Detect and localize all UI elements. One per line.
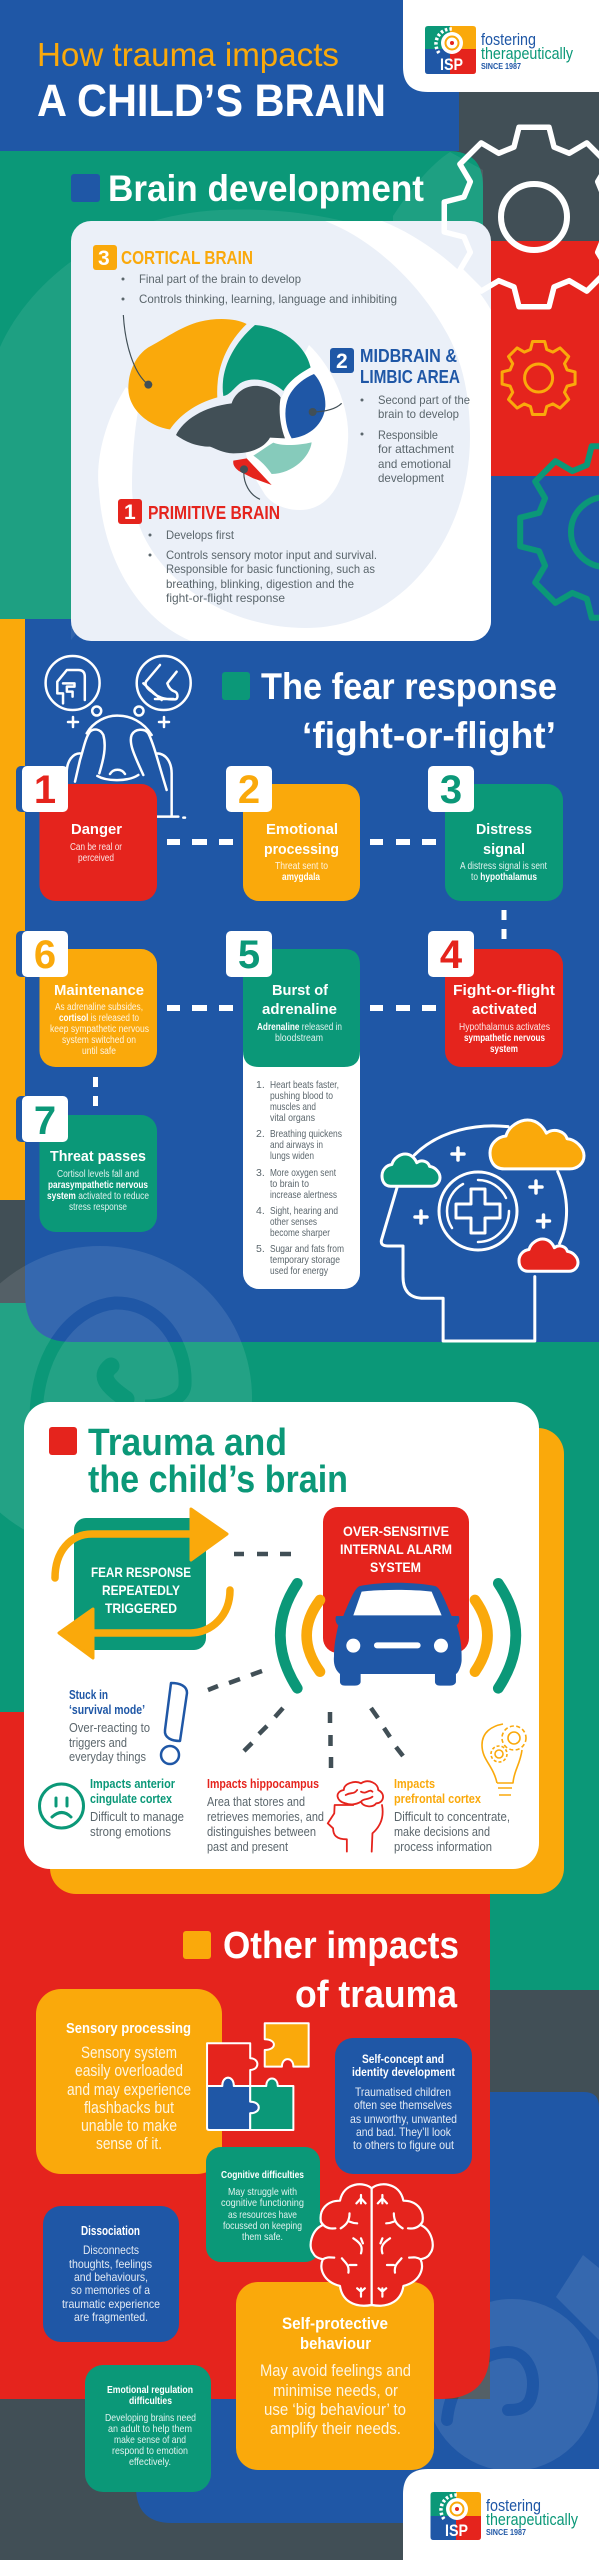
box: emotional regulation difficulties: effectively. — [129, 2456, 171, 2468]
step 2: emotional processing: Threat sent to — [275, 861, 328, 872]
step 7: threat passes: stress response — [69, 1202, 127, 1213]
callout: stuck in survival mode — [69, 1683, 187, 1764]
label: midbrain and limbic area: and emotional — [378, 457, 451, 471]
box: emotional regulation difficulties: Emotional regulation — [107, 2384, 193, 2396]
box: sensory processing — [36, 1989, 222, 2174]
callout: hippocampus: distinguishes between — [207, 1825, 316, 1839]
step 7: threat passes: 7 — [34, 1099, 56, 1143]
callout: stuck in survival mode: ‘survival mode’ — [69, 1703, 145, 1717]
numbered list of effects: pushing blood to — [270, 1090, 333, 1102]
logo panel: bottom: fostering — [486, 2496, 541, 2515]
step 4: fight-or-flight activated: 4 — [440, 933, 463, 977]
label: midbrain and limbic area: for attachment — [378, 442, 455, 456]
step 4: fight-or-flight activated: Hypothalamus activates — [459, 1022, 550, 1033]
label: primitive brain: Develops first — [166, 528, 235, 542]
icon: green gear — [520, 446, 599, 618]
step 6: maintenance: system switched on — [62, 1035, 136, 1046]
label: midbrain and limbic area: development — [378, 471, 445, 485]
box: cognitive difficulties: them safe. — [242, 2231, 283, 2243]
box: sensory processing: and may experience — [67, 2080, 191, 2099]
step 5: burst of adrenaline: Adrenaline released in — [257, 1022, 342, 1033]
label: cortical brain: Final part of the brain to develop — [139, 272, 301, 286]
box: emotional regulation difficulties: an adult to help them — [108, 2423, 192, 2435]
box: emotional regulation difficulties: difficulties — [129, 2395, 172, 2407]
numbered list of effects: vital organs — [270, 1112, 315, 1124]
box: dissociation: and behaviours, — [74, 2270, 148, 2284]
logo panel: top: SINCE 1987 — [481, 61, 521, 71]
box: over-sensitive internal alarm system with car: INTERNAL ALARM — [340, 1541, 452, 1557]
step 5: burst of adrenaline: adrenaline — [262, 1001, 337, 1018]
box: dissociation: thoughts, feelings — [69, 2257, 152, 2271]
step 6: maintenance — [16, 931, 157, 1067]
box: self-concept and identity development: identity development — [352, 2065, 455, 2079]
label: primitive brain: Controls sensory motor input and survival. — [166, 548, 377, 562]
box: dissociation: are fragmented. — [74, 2310, 148, 2324]
box: cognitive difficulties: cognitive functioning — [221, 2197, 304, 2209]
numbered list of effects: 2. — [256, 1128, 265, 1140]
step 5: burst of adrenaline: 5 — [238, 933, 260, 977]
step 3: distress signal: 3 — [440, 768, 462, 812]
logo panel: bottom — [403, 2469, 599, 2560]
box: self-concept and identity development: as unworthy, unwanted — [350, 2112, 457, 2126]
step 1: danger: 1 — [34, 768, 56, 812]
heading: other impacts of trauma — [183, 1925, 459, 2016]
label: cortical brain: CORTICAL BRAIN — [121, 248, 253, 268]
flow connectors — [93, 839, 506, 1106]
step 1: danger: Can be real or — [70, 842, 123, 853]
label: primitive brain: fight-or-flight response — [166, 591, 285, 605]
step 4: fight-or-flight activated: sympathetic nervous — [464, 1033, 545, 1044]
box: emotional regulation difficulties: respond to emotion — [112, 2445, 188, 2457]
label: primitive brain: Responsible for basic functioning, such as — [166, 562, 375, 576]
box: self-concept and identity development: and bad. They’ll look — [356, 2125, 452, 2139]
step 3: distress signal: signal — [483, 841, 525, 858]
step 6: maintenance: keep sympathetic nervous — [50, 1024, 149, 1035]
logo panel: top — [403, 0, 599, 92]
icon: sad face — [40, 1784, 84, 1828]
step 3: distress signal: A distress signal is sent — [460, 861, 547, 872]
icon: large white gear — [444, 127, 599, 307]
step 2: emotional processing: 2 — [238, 768, 260, 812]
label: midbrain and limbic area: LIMBIC AREA — [360, 367, 460, 387]
heading: other impacts of trauma: Other impacts — [223, 1925, 459, 1967]
step 7: threat passes — [16, 1096, 157, 1232]
numbered list of effects: 3. — [256, 1167, 265, 1179]
numbered list of effects: Heart beats faster, — [270, 1079, 339, 1091]
step 2: emotional processing: processing — [264, 841, 339, 858]
numbered list of effects: to brain to — [270, 1178, 309, 1190]
step 2: emotional processing — [226, 766, 360, 901]
callout: hippocampus: Area that stores and — [207, 1795, 305, 1809]
step 6: maintenance: Maintenance — [54, 982, 144, 999]
box: dissociation — [43, 2206, 179, 2342]
step 4: fight-or-flight activated: Fight-or-flight — [453, 982, 555, 999]
box: self-protective behaviour: Self-protective — [282, 2314, 388, 2333]
numbered list of effects: used for energy — [270, 1265, 329, 1277]
callout: hippocampus: retrieves memories, and — [207, 1810, 324, 1824]
box: self-concept and identity development: Traumatised children — [355, 2085, 451, 2099]
label: midbrain and limbic area: Second part of the — [378, 393, 470, 407]
box: self-protective behaviour: minimise needs, or — [273, 2381, 398, 2400]
title — [37, 36, 386, 126]
box: fear response repeatedly triggered with loop arrows: FEAR RESPONSE — [91, 1564, 191, 1580]
callout: prefrontal cortex: prefrontal cortex — [394, 1792, 481, 1806]
label: primitive brain — [118, 499, 377, 605]
heading: trauma and the child's brain: Trauma and — [88, 1422, 287, 1464]
brain diagram — [123, 315, 342, 499]
box: dissociation: Disconnects — [83, 2243, 139, 2257]
callout: prefrontal cortex — [394, 1724, 526, 1854]
logo panel: bottom: SINCE 1987 — [486, 2527, 526, 2537]
numbered list of effects: muscles and — [270, 1101, 316, 1113]
callout: prefrontal cortex: Difficult to concentrate, — [394, 1810, 510, 1824]
icon: head with clouds and medical cross — [381, 1120, 584, 1341]
step 7: threat passes: Threat passes — [50, 1148, 146, 1165]
label: midbrain and limbic area — [330, 346, 470, 485]
box: self-protective behaviour: behaviour — [300, 2334, 371, 2353]
heading: brain development: Brain development — [108, 168, 424, 209]
box: self-concept and identity development: often see themselves — [354, 2098, 452, 2112]
step 3: distress signal: to hypothalamus — [471, 872, 537, 883]
callout: anterior cingulate cortex: Difficult to manage — [90, 1810, 184, 1824]
step 1: danger: Danger — [71, 821, 122, 838]
step 2: emotional processing: amygdala — [282, 872, 320, 883]
label: cortical brain: 3 — [98, 247, 110, 270]
icon: puzzle pieces — [207, 2023, 309, 2130]
box: sensory processing: sense of it. — [96, 2134, 162, 2153]
heading: other impacts of trauma: of trauma — [295, 1974, 458, 2016]
icon: person with fight and flight thoughts — [46, 656, 191, 818]
box: fear response repeatedly triggered with loop arrows: REPEATEDLY — [102, 1582, 181, 1598]
box: emotional regulation difficulties: Developing brains need — [105, 2412, 196, 2424]
numbered list of effects: and airways in — [270, 1139, 323, 1151]
numbered list of effects: Breathing quickens — [270, 1128, 342, 1140]
step 3: distress signal: Distress — [476, 821, 532, 838]
step 7: threat passes: Cortisol levels fall and — [57, 1169, 139, 1180]
box: self-concept and identity development: Self-concept and — [362, 2052, 444, 2066]
callout: stuck in survival mode: Stuck in — [69, 1688, 108, 1702]
heading: fear response: ‘fight-or-flight’ — [302, 715, 556, 756]
callout: anterior cingulate cortex: Impacts anterior — [90, 1777, 175, 1791]
numbered list of effects: Sight, hearing and — [270, 1205, 338, 1217]
heading: trauma and the child's brain: the child’s brain — [88, 1459, 348, 1501]
box: self-protective behaviour: amplify their needs. — [270, 2419, 401, 2438]
callout: stuck in survival mode: Over-reacting to — [69, 1721, 150, 1735]
box: emotional regulation difficulties: make sense of and — [114, 2434, 186, 2446]
callout: anterior cingulate cortex: cingulate cortex — [90, 1792, 172, 1806]
step 3: distress signal — [428, 766, 563, 901]
numbered list of effects: Sugar and fats from — [270, 1243, 344, 1255]
callout: hippocampus: past and present — [207, 1840, 288, 1854]
box: cognitive difficulties: focussed on keeping — [223, 2220, 302, 2232]
numbered list of effects: 4. — [256, 1205, 265, 1217]
callout: prefrontal cortex: Impacts — [394, 1777, 435, 1791]
logo panel: top: ISP — [440, 55, 463, 74]
box: dissociation: traumatic experience — [62, 2297, 160, 2311]
step 4: fight-or-flight activated: system — [490, 1044, 518, 1055]
label: primitive brain: breathing, blinking, digestion and the — [166, 577, 354, 591]
box: sensory processing: flashbacks but — [84, 2098, 174, 2117]
step 5: burst of adrenaline: bloodstream — [275, 1033, 323, 1044]
callout: hippocampus: Impacts hippocampus — [207, 1777, 319, 1791]
box: self-protective behaviour: use ‘big behaviour’ to — [264, 2400, 406, 2419]
callout: prefrontal cortex: process information — [394, 1840, 492, 1854]
box: cognitive difficulties — [206, 2147, 320, 2262]
step 7: threat passes: system activated to reduce — [47, 1191, 149, 1202]
numbered list of effects: More oxygen sent — [270, 1167, 336, 1179]
numbered list of effects: other senses — [270, 1216, 317, 1228]
step 6: maintenance: 6 — [34, 933, 56, 977]
heading: fear response — [222, 666, 557, 756]
label: midbrain and limbic area: Responsible — [378, 428, 438, 442]
step 5: burst of adrenaline — [226, 931, 360, 1289]
label: cortical brain: Controls thinking, learning, language and inhibiting — [139, 292, 397, 306]
numbered list of effects: 5. — [256, 1243, 265, 1255]
box: dissociation: so memories of a — [71, 2283, 150, 2297]
label: cortical brain — [93, 245, 397, 306]
step 1: danger: perceived — [78, 853, 114, 864]
box: over-sensitive internal alarm system with car: OVER-SENSITIVE — [343, 1523, 449, 1539]
callout: prefrontal cortex: make decisions and — [394, 1825, 490, 1839]
panel: trauma and the child's brain — [24, 1402, 564, 1894]
box: self-concept and identity development — [335, 2038, 472, 2174]
callout: anterior cingulate cortex — [40, 1777, 184, 1839]
logo panel: top: fostering — [481, 30, 536, 49]
callout: stuck in survival mode: everyday things — [69, 1750, 146, 1764]
box: self-protective behaviour: May avoid feelings and — [260, 2361, 411, 2380]
box: self-protective behaviour — [236, 2282, 434, 2470]
box: sensory processing: Sensory system — [81, 2043, 177, 2062]
step 2: emotional processing: Emotional — [266, 821, 338, 838]
logo panel: bottom: ISP — [445, 2521, 468, 2540]
box: over-sensitive internal alarm system with car: SYSTEM — [370, 1559, 421, 1575]
box: emotional regulation difficulties — [85, 2365, 211, 2492]
title: How trauma impacts — [37, 36, 339, 73]
callout: hippocampus — [207, 1777, 383, 1854]
box: fear response repeatedly triggered with loop arrows — [55, 1509, 230, 1658]
heading: fear response: The fear response — [261, 666, 557, 707]
step 7: threat passes: parasympathetic nervous — [48, 1180, 148, 1191]
numbered list of effects: increase alertness — [270, 1189, 337, 1201]
numbered list of effects: lungs widen — [270, 1150, 314, 1162]
logo panel: bottom: therapeutically — [486, 2510, 578, 2529]
panel: brain development — [71, 221, 491, 641]
label: midbrain and limbic area: 2 — [336, 350, 348, 373]
logo panel: top: therapeutically — [481, 44, 573, 63]
label: primitive brain: 1 — [124, 501, 136, 524]
step 5: burst of adrenaline: Burst of — [272, 982, 329, 999]
icon: light bulb with gears — [482, 1724, 526, 1795]
box: dissociation: Dissociation — [81, 2224, 140, 2238]
box: fear response repeatedly triggered with loop arrows: TRIGGERED — [105, 1600, 177, 1616]
numbered list of effects: become sharper — [270, 1227, 330, 1239]
step 6: maintenance: As adrenaline subsides, — [55, 1002, 143, 1013]
box: cognitive difficulties: as resources have — [228, 2209, 297, 2221]
step 4: fight-or-flight activated — [428, 931, 563, 1067]
box: cognitive difficulties: Cognitive difficulties — [221, 2169, 304, 2181]
icon: white outlined brain — [311, 2184, 433, 2306]
box: self-concept and identity development: to others to figure out — [353, 2138, 455, 2152]
title: A CHILD’S BRAIN — [37, 75, 386, 126]
box: sensory processing: Sensory processing — [66, 2020, 191, 2037]
step 1: danger — [16, 766, 157, 901]
step 4: fight-or-flight activated: activated — [472, 1001, 537, 1018]
box: sensory processing: easily overloaded — [75, 2061, 183, 2080]
numbered list of effects — [256, 1079, 344, 1277]
step 6: maintenance: cortisol is released to — [59, 1013, 139, 1024]
label: midbrain and limbic area: brain to develop — [378, 407, 459, 421]
callout: stuck in survival mode: triggers and — [69, 1736, 127, 1750]
step 6: maintenance: until safe — [82, 1046, 116, 1057]
heading: trauma and the child's brain — [49, 1422, 348, 1501]
icon: small gold gear — [502, 342, 575, 414]
icon: head with brain — [328, 1781, 383, 1852]
label: midbrain and limbic area: MIDBRAIN & — [360, 346, 457, 366]
callout: anterior cingulate cortex: strong emotions — [90, 1825, 171, 1839]
numbered list of effects: temporary storage — [270, 1254, 340, 1266]
box: sensory processing: unable to make — [81, 2116, 177, 2135]
numbered list of effects: 1. — [256, 1079, 265, 1091]
box: over-sensitive internal alarm system with car — [280, 1507, 516, 1688]
icon: exclamation mark — [161, 1683, 187, 1764]
label: primitive brain: PRIMITIVE BRAIN — [148, 503, 280, 523]
box: cognitive difficulties: May struggle with — [228, 2186, 297, 2198]
connector dashes — [208, 1554, 403, 1768]
